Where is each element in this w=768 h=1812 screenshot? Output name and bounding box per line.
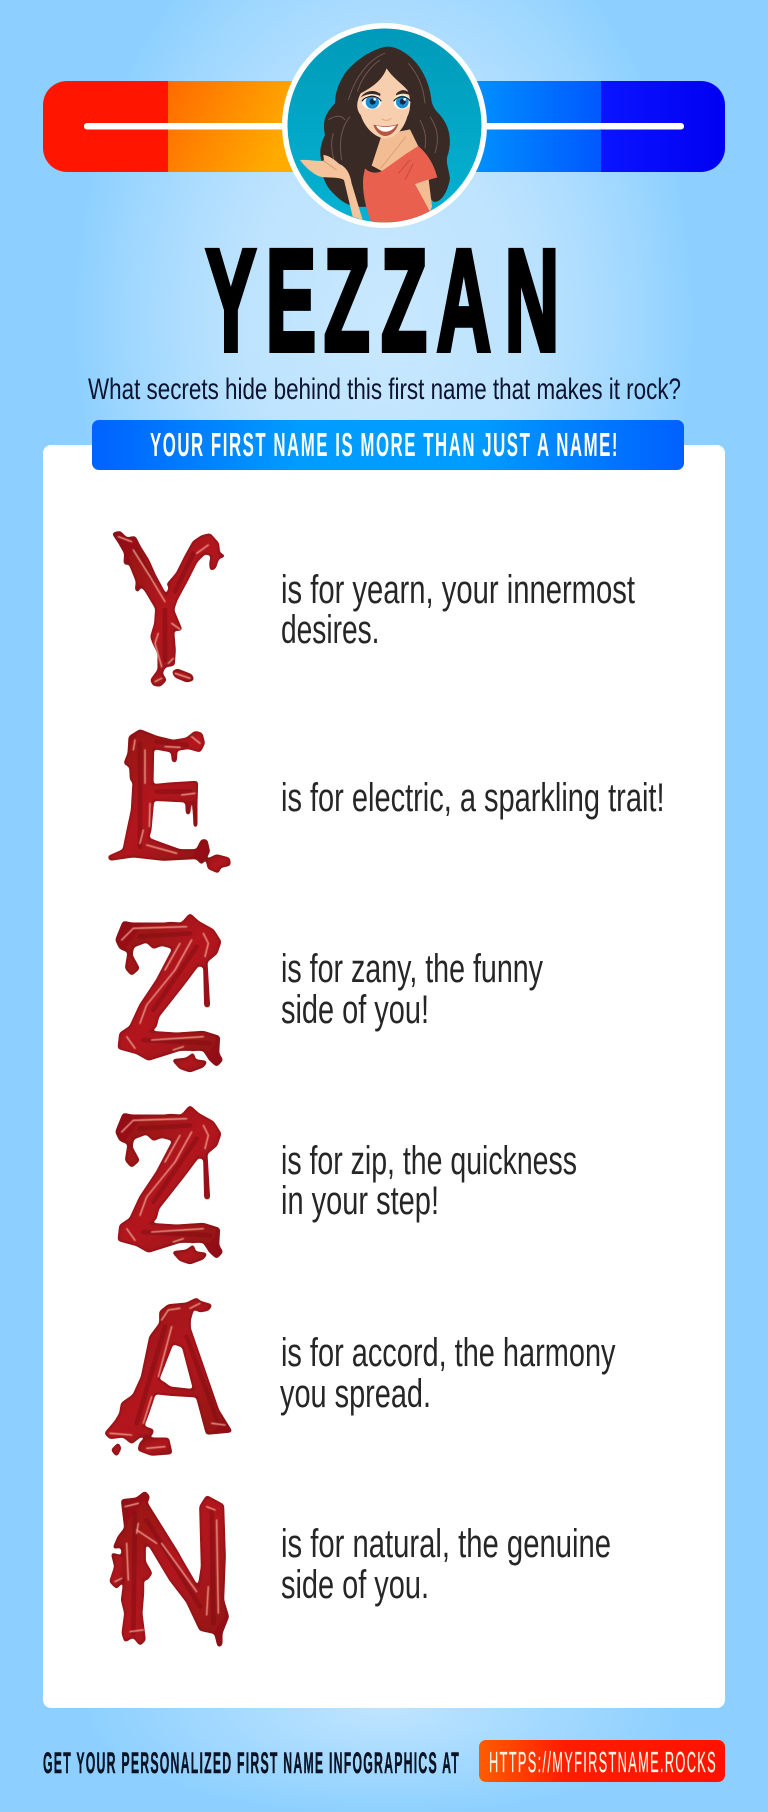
row: N [110, 1492, 611, 1647]
header bar [43, 81, 725, 172]
icon: blood letter E [108, 730, 230, 873]
text: A: is for accord, the harmony [281, 1331, 616, 1375]
text: A: you spread. [280, 1372, 431, 1416]
banner [92, 420, 684, 470]
text: Z: is for zany, the funny [281, 947, 543, 991]
text: N: is for natural, the genuine [281, 1522, 611, 1566]
text: Y [281, 568, 635, 652]
text: Z [281, 947, 543, 1032]
icon: blood letter N [110, 1492, 228, 1647]
row: Z [116, 914, 543, 1072]
text: Z second: is for zip, the quickness [281, 1139, 577, 1183]
text: Z: side of you! [281, 988, 429, 1032]
text: Z second [281, 1139, 577, 1223]
footer button [479, 1740, 725, 1782]
text: N: side of you. [281, 1563, 429, 1607]
row: Y [113, 532, 635, 686]
icon: blood letter Z [116, 914, 222, 1072]
text: Z second: in your step! [281, 1179, 439, 1223]
text: Y: desires. [281, 608, 380, 652]
text: Y: is for yearn, your innermost [281, 568, 635, 612]
row: Z second [116, 1106, 577, 1264]
icon: blood letter Z second [116, 1106, 222, 1264]
text: A [280, 1331, 616, 1416]
icon: woman avatar [282, 23, 487, 228]
title: YEZZAN [206, 221, 559, 381]
text: N [281, 1522, 611, 1607]
row: A [105, 1298, 615, 1456]
icon: blood letter A [105, 1298, 232, 1456]
row: E [108, 730, 665, 873]
icon: blood letter Y [113, 532, 225, 686]
panel: letters [43, 445, 725, 1708]
